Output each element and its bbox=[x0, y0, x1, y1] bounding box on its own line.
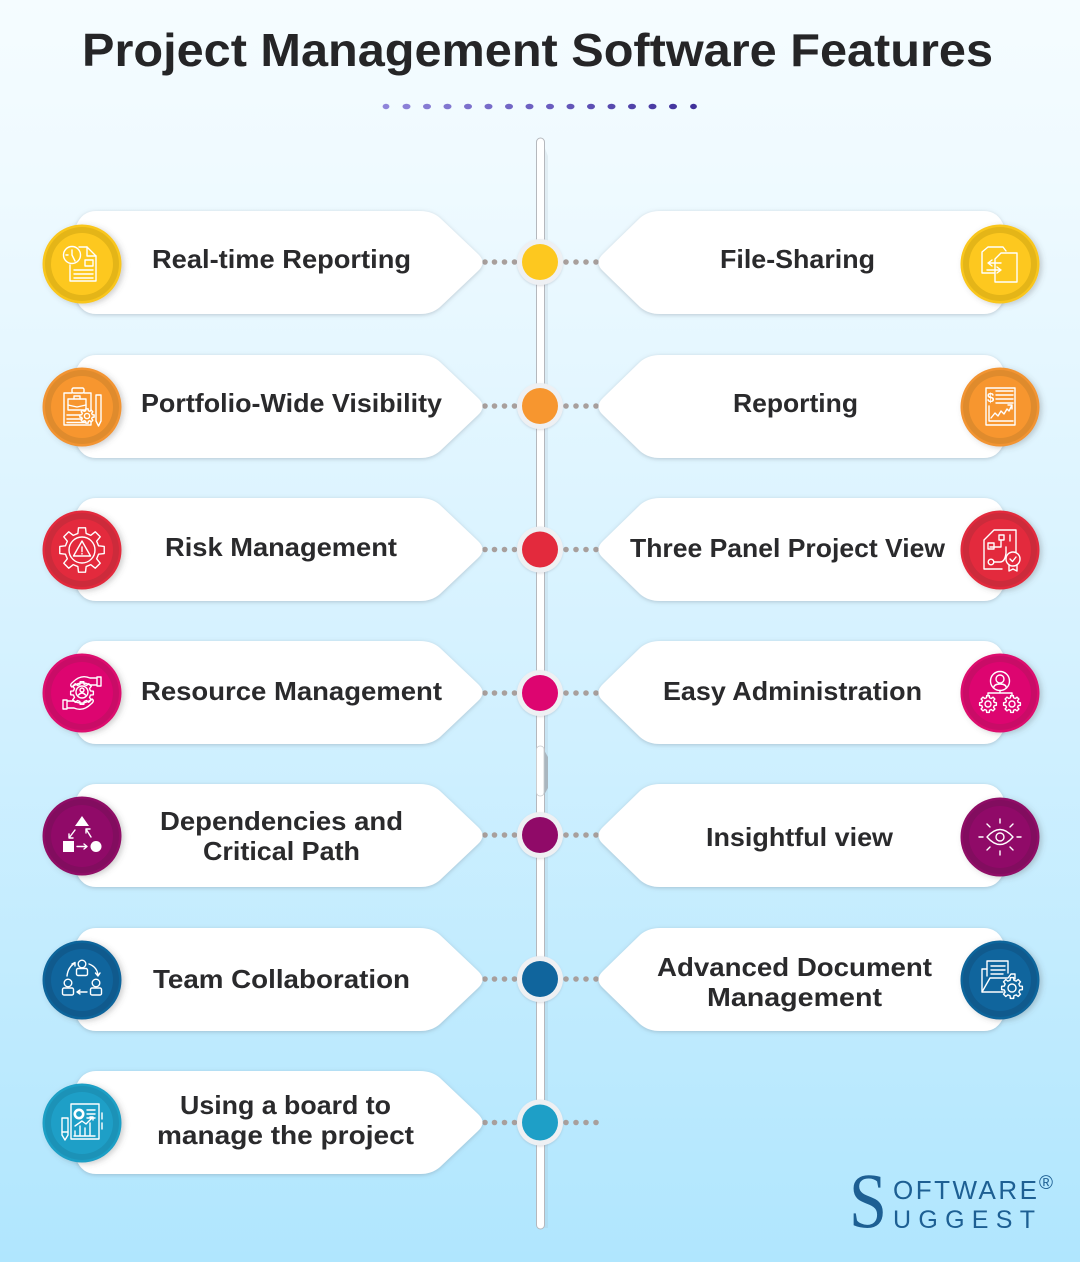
connector dots bbox=[563, 976, 599, 982]
title: Project Management Software Features bbox=[82, 24, 993, 76]
icon: project plan with badge bbox=[960, 510, 1040, 590]
connector dots bbox=[482, 1120, 517, 1125]
panel bbox=[598, 784, 1004, 887]
panel bbox=[76, 1071, 482, 1174]
label: File-Sharing bbox=[720, 244, 875, 274]
node 7 bbox=[517, 1100, 563, 1146]
logo: SoftwareSuggest: UGGEST bbox=[893, 1206, 1035, 1234]
label: Real-time Reporting bbox=[152, 244, 411, 274]
row 4 left: Resource Management bbox=[42, 641, 517, 744]
logo: SoftwareSuggest: ® bbox=[1039, 1173, 1053, 1194]
label: Insightful view bbox=[706, 822, 894, 852]
connector dots bbox=[482, 690, 517, 696]
icon: gear with warning bbox=[42, 510, 122, 590]
icon: hands holding gear bbox=[42, 654, 122, 732]
row 6 left: Team Collaboration bbox=[42, 928, 517, 1031]
label: Resource Management bbox=[141, 676, 442, 706]
row 1 right: File-Sharing bbox=[563, 211, 1040, 314]
icon: document folder with gear bbox=[960, 940, 1040, 1020]
icon: file sharing bbox=[960, 224, 1040, 304]
label: Dependencies and bbox=[160, 806, 403, 836]
connector dots bbox=[563, 403, 599, 409]
row 1 left: Real-time Reporting bbox=[42, 211, 517, 314]
icon: clipboard with briefcase and gear bbox=[42, 368, 122, 446]
icon: report with clock bbox=[42, 224, 122, 304]
icon: eye bbox=[960, 798, 1040, 876]
panel bbox=[598, 211, 1004, 314]
label bbox=[657, 952, 932, 1012]
panel bbox=[76, 355, 482, 458]
node 4 bbox=[517, 670, 563, 716]
panel bbox=[598, 498, 1004, 601]
node 3 bbox=[517, 526, 563, 572]
label: Three Panel Project View bbox=[630, 533, 946, 563]
panel bbox=[76, 928, 482, 1031]
logo: SoftwareSuggest: OFTWARE bbox=[893, 1175, 1037, 1205]
label: Advanced Document bbox=[657, 952, 932, 982]
icon: financial report: $ bbox=[987, 390, 995, 405]
node 2 bbox=[517, 383, 563, 429]
icon: financial report bbox=[960, 368, 1040, 446]
title dotted divider bbox=[383, 104, 697, 109]
row 7 right connector dots bbox=[563, 1120, 599, 1125]
icon: team cycle bbox=[42, 940, 122, 1020]
logo: SoftwareSuggest bbox=[849, 1157, 1053, 1244]
connector dots bbox=[563, 259, 599, 265]
label: Portfolio-Wide Visibility bbox=[141, 388, 443, 418]
node 5 bbox=[517, 812, 563, 858]
connector dots bbox=[563, 690, 599, 696]
panel bbox=[598, 928, 1004, 1031]
panel bbox=[76, 211, 482, 314]
panel bbox=[598, 355, 1004, 458]
row 3 right: Three Panel Project View bbox=[563, 498, 1040, 601]
label: Management bbox=[707, 982, 882, 1012]
connector dots bbox=[482, 832, 517, 838]
icon: board with charts bbox=[42, 1084, 122, 1162]
connector dots bbox=[482, 403, 517, 409]
label bbox=[157, 1090, 414, 1150]
icon: dependency shapes bbox=[42, 796, 122, 876]
panel bbox=[76, 498, 482, 601]
panel bbox=[76, 784, 482, 887]
row 2 right: Reporting bbox=[563, 355, 1040, 458]
row 2 left: Portfolio-Wide Visibility bbox=[42, 355, 517, 458]
label bbox=[160, 806, 403, 866]
connector dots bbox=[482, 547, 517, 552]
connector dots bbox=[563, 547, 599, 552]
label: Team Collaboration bbox=[153, 964, 410, 994]
row 4 right: Easy Administration bbox=[563, 641, 1040, 744]
label: manage the project bbox=[157, 1120, 414, 1150]
row 5 right: Insightful view bbox=[563, 784, 1040, 887]
row 3 left: Risk Management bbox=[42, 498, 517, 601]
node 1 bbox=[517, 239, 563, 285]
label: Critical Path bbox=[203, 836, 360, 866]
connector dots bbox=[563, 832, 599, 838]
node 6 bbox=[517, 956, 563, 1002]
central timeline bbox=[536, 138, 548, 1229]
connector dots bbox=[482, 259, 517, 265]
label: Reporting bbox=[733, 388, 858, 418]
panel bbox=[76, 641, 482, 744]
connector dots bbox=[482, 976, 517, 982]
icon: admin with two gears bbox=[960, 654, 1040, 732]
label: Using a board to bbox=[180, 1090, 391, 1120]
panel bbox=[598, 641, 1004, 744]
row 5 left: Dependencies and Critical Path bbox=[42, 784, 517, 887]
label: Easy Administration bbox=[663, 676, 922, 706]
logo: SoftwareSuggest: S bbox=[849, 1157, 887, 1244]
row 7 left: Using a board to manage the project bbox=[42, 1071, 517, 1174]
label: Risk Management bbox=[165, 532, 397, 562]
row 6 right: Advanced Document Management bbox=[563, 928, 1040, 1031]
